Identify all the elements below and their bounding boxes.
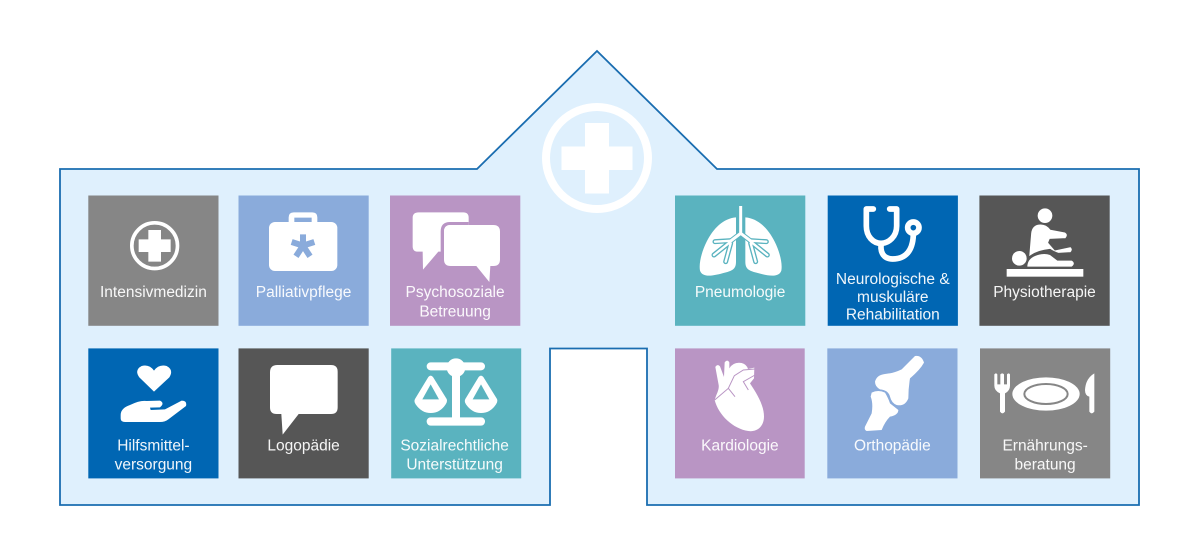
tile: Ernährungsberatung (980, 348, 1110, 478)
tile: Physiotherapie: Physiotherapie (993, 284, 1096, 301)
tile: Kardiologie: Kardiologie (701, 438, 779, 454)
icon: stethoscope (866, 209, 919, 259)
icon: heart anatomy (715, 361, 764, 431)
tile: Intensivmedizin (88, 196, 218, 326)
tile: Physiotherapie (979, 196, 1110, 326)
tile: Neurologische und muskuläre Rehabilitation (828, 196, 958, 326)
tile: Orthopädie (827, 348, 958, 478)
icon: physiotherapy massage (1007, 208, 1083, 277)
icon: lungs (700, 206, 782, 276)
icon: plate and cutlery (994, 373, 1094, 413)
icon: scales (414, 358, 497, 426)
tile: Hilfsmittelversorgung (88, 348, 218, 478)
tile: Palliativpflege (238, 196, 369, 326)
tile: Orthopädie: Orthopädie (854, 438, 931, 454)
tile: Sozialrechtliche Unterstützung: Sozialrechtliche (400, 438, 509, 454)
tile: Logopädie: Logopädie (267, 438, 340, 454)
icon: medical case (269, 212, 337, 271)
icon: two speech bubbles (413, 212, 500, 282)
tile: Sozialrechtliche Unterstützung (391, 348, 521, 478)
tile: Hilfsmittelversorgung: Hilfsmittel- (117, 438, 190, 454)
tile: Pneumologie: Pneumologie (695, 284, 785, 301)
tile: Neurologische und muskuläre Rehabilitation: Rehabilitation (846, 306, 940, 324)
icon: speech bubble (270, 365, 338, 435)
tile: Pneumologie (675, 196, 805, 326)
icon: building medical cross (546, 107, 648, 209)
tile: Intensivmedizin: Intensivmedizin (100, 284, 207, 301)
icon: joint bones (865, 356, 924, 431)
tile: Ernährungsberatung: Ernährungs- (1002, 438, 1088, 454)
tile: Neurologische und muskuläre Rehabilitation: muskuläre (857, 289, 929, 306)
tile: Logopädie (238, 348, 369, 478)
tile: Psychosoziale Betreuung (390, 196, 520, 326)
icon: heart on hand (121, 366, 186, 422)
icon: medical cross in circle (132, 223, 177, 268)
tile: Psychosoziale Betreuung: Psychosoziale (406, 284, 505, 301)
tile: Ernährungsberatung: beratung (1014, 456, 1076, 474)
tile: Neurologische und muskuläre Rehabilitation: Neurologische & (836, 271, 950, 288)
tile: Palliativpflege: Palliativpflege (256, 284, 351, 301)
building outline (60, 51, 1139, 505)
tile: Psychosoziale Betreuung: Betreuung (419, 304, 491, 320)
tile: Hilfsmittelversorgung: versorgung (115, 456, 192, 474)
tile: Sozialrechtliche Unterstützung: Unterstützung (406, 456, 503, 474)
tile: Kardiologie (675, 348, 805, 478)
